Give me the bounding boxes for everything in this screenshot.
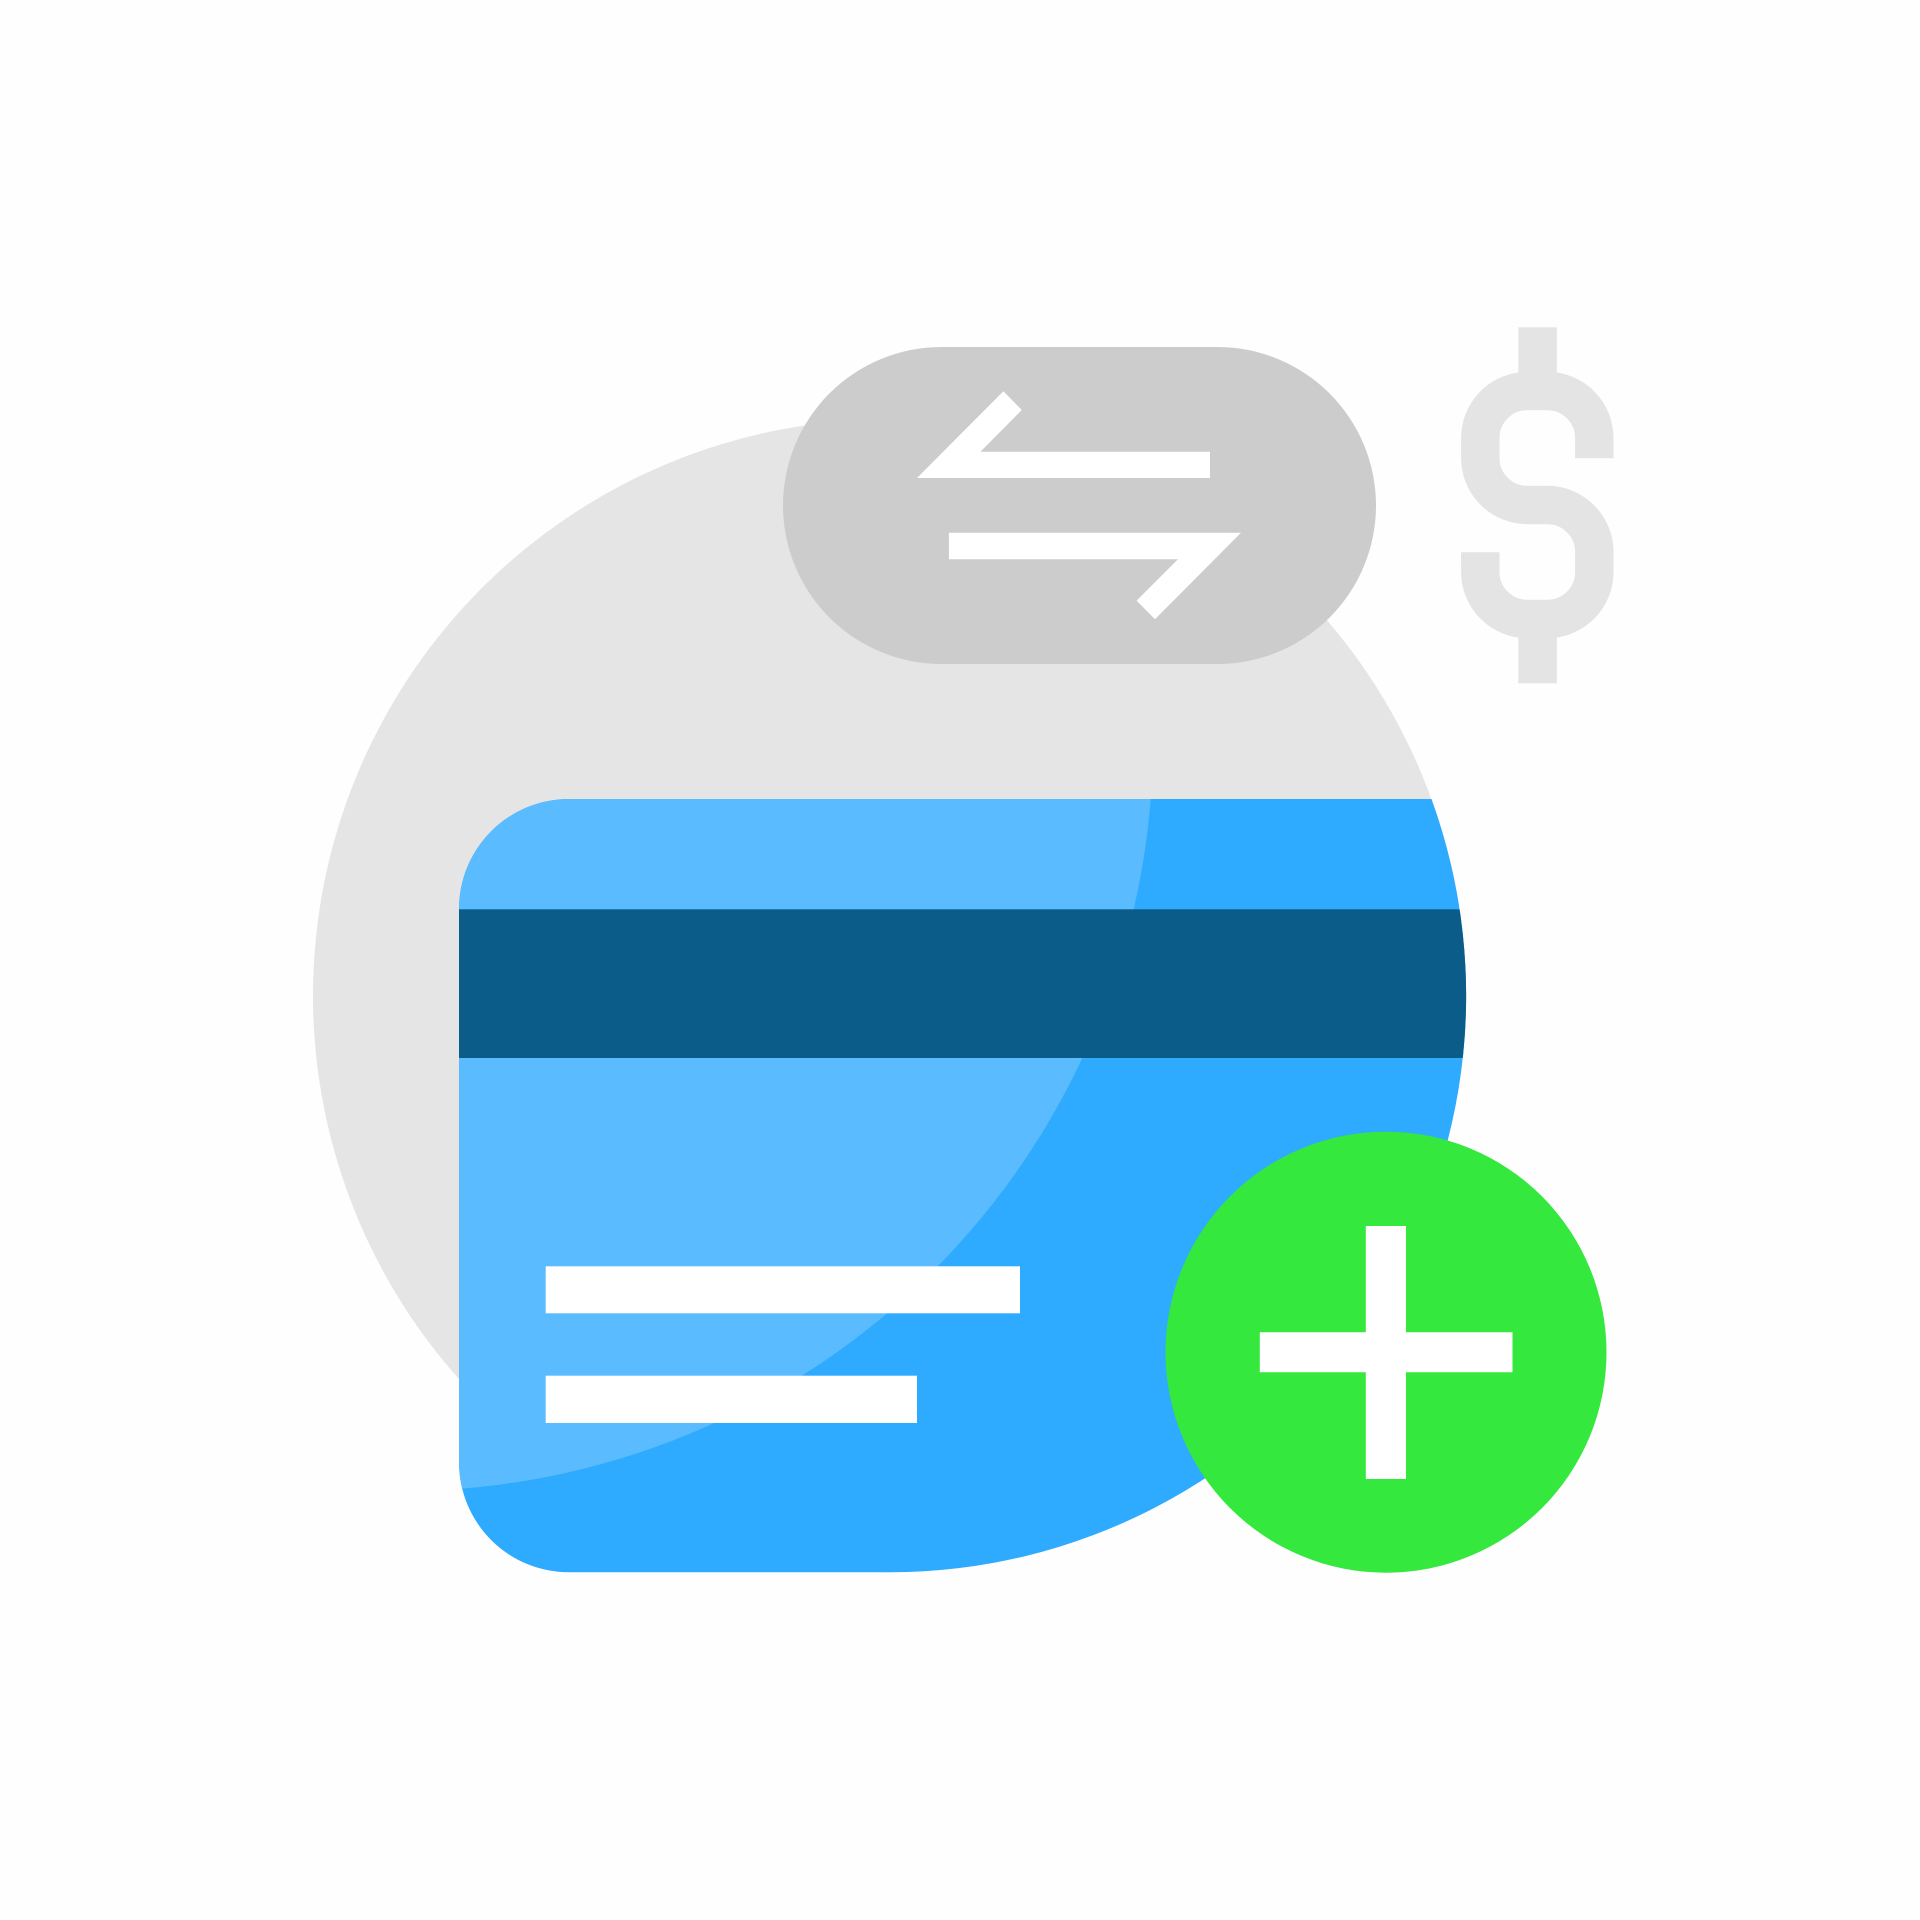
card body — [459, 799, 1466, 1572]
illustration: credit card with transfer, dollar and plus icons — [313, 327, 1614, 1573]
pill background — [783, 347, 1376, 664]
magnetic stripe — [459, 909, 1479, 1058]
icon: dollar sign — [1480, 327, 1594, 683]
icon: left arrow — [917, 391, 1210, 478]
green circle — [1166, 1132, 1606, 1573]
dollar S curve — [1480, 391, 1594, 619]
credit card — [459, 799, 1466, 1572]
plus sign — [1260, 1226, 1512, 1479]
card text line 1 — [546, 1266, 1020, 1313]
dollar top bar — [1518, 327, 1557, 377]
icon: plus badge — [1166, 1132, 1606, 1573]
dollar bottom bar — [1518, 633, 1557, 683]
exchange pill — [783, 347, 1376, 664]
large grey background circle — [313, 419, 1466, 1572]
card light highlight — [459, 799, 1151, 1488]
card text line 2 — [546, 1376, 917, 1423]
icon: right arrow — [949, 533, 1241, 619]
